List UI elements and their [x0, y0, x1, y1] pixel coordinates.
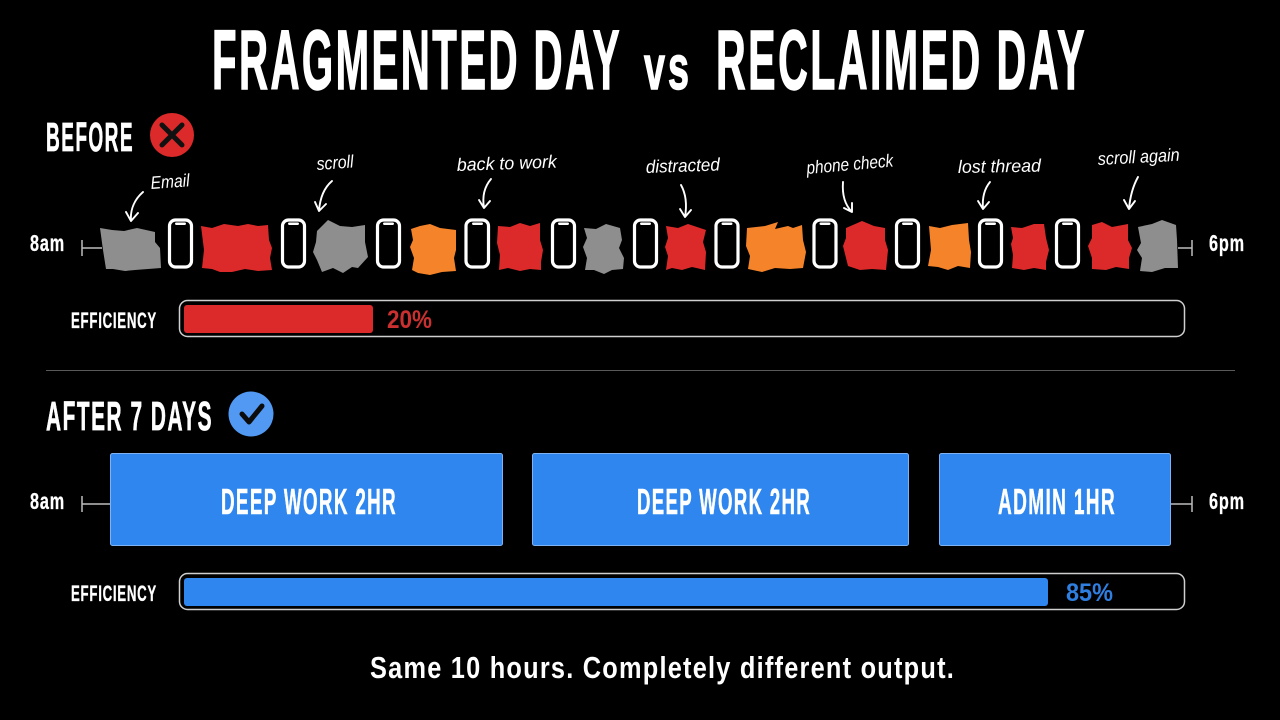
phone 6: [634, 220, 656, 267]
block: red 6: [1088, 222, 1132, 270]
timeline end tick: [1171, 496, 1192, 512]
annotation: scroll again: scroll again: [1097, 145, 1180, 169]
block: deep work 1: DEEP WORK 2HR: [221, 481, 397, 522]
block: red 5: [1011, 224, 1049, 270]
annotation: scroll: scroll: [316, 151, 355, 174]
annotation: lost thread: [958, 156, 1042, 209]
annotation: Email: [126, 170, 191, 221]
panel: before: [30, 113, 1245, 336]
title: FRAGMENTED DAY: [212, 13, 622, 107]
label: 8am start: 8am: [30, 230, 65, 256]
efficiency label: after: EFFICIENCY: [71, 581, 157, 606]
block: gray 1: [100, 228, 161, 271]
heading: after 7 days: AFTER 7 DAYS: [46, 393, 213, 439]
annotation: phone check: phone check: [805, 150, 895, 178]
phone 1: [170, 220, 192, 267]
footer tagline: Same 10 hours. Completely different output.: [370, 650, 955, 685]
efficiency bar: after 85%: [180, 574, 1184, 610]
annotation: lost thread: lost thread: [958, 156, 1042, 177]
timeline end tick: [1178, 240, 1192, 256]
annotation: back to work: back to work: [456, 151, 558, 175]
label: 6pm end: 6pm: [1209, 230, 1245, 256]
annotation: scroll again: [1097, 145, 1180, 209]
block: red 1: [201, 224, 272, 272]
icon: blue check: [228, 392, 274, 436]
block: gray 3: [583, 224, 624, 274]
annotation: Email: Email: [150, 170, 191, 193]
annotation: distracted: [645, 154, 721, 217]
efficiency bar: after 85%: 85%: [1066, 579, 1113, 607]
block: gray 2: [313, 220, 368, 273]
efficiency label: before: EFFICIENCY: [71, 308, 157, 333]
annotation: back to work: [456, 151, 558, 208]
block: orange 3: [928, 223, 971, 270]
label: 8am start: 8am: [30, 488, 65, 514]
timeline start tick: [82, 240, 102, 256]
annotation: distracted: distracted: [645, 154, 721, 177]
timeline start tick: [82, 496, 110, 512]
title: vs: [644, 34, 692, 103]
phone 10: [980, 220, 1002, 267]
phone 4: [466, 220, 488, 267]
phone 2: [282, 220, 304, 267]
phone 5: [552, 220, 574, 267]
phone 11: [1056, 220, 1078, 267]
block: red 3: [665, 224, 706, 270]
block: admin: ADMIN 1HR: [998, 481, 1116, 522]
panel: after 7 days: [30, 392, 1245, 610]
block: orange 2: [746, 222, 806, 272]
block: deep work 1: [110, 454, 502, 546]
block: orange 1: [410, 224, 456, 275]
block: deep work 2: DEEP WORK 2HR: [637, 481, 811, 522]
timeline: fragmented day: [100, 220, 1178, 275]
phone 8: [814, 220, 836, 267]
panel: before: BEFORE: [46, 114, 134, 160]
block: red 2: [497, 223, 543, 271]
annotation: scroll: [315, 151, 355, 211]
label: 6pm end: 6pm: [1209, 488, 1245, 514]
efficiency bar: before 20%: [180, 300, 1184, 336]
phone 3: [378, 220, 400, 267]
block: deep work 2: [532, 454, 908, 546]
phone 9: [896, 220, 918, 267]
efficiency bar: before 20%: 20%: [387, 306, 432, 334]
block: admin: [940, 454, 1170, 546]
phone 7: [716, 220, 738, 267]
annotation: phone check: [805, 150, 895, 212]
block: red 4: [843, 221, 888, 270]
icon: red cross: [150, 113, 194, 157]
block: gray 4: [1137, 220, 1178, 272]
